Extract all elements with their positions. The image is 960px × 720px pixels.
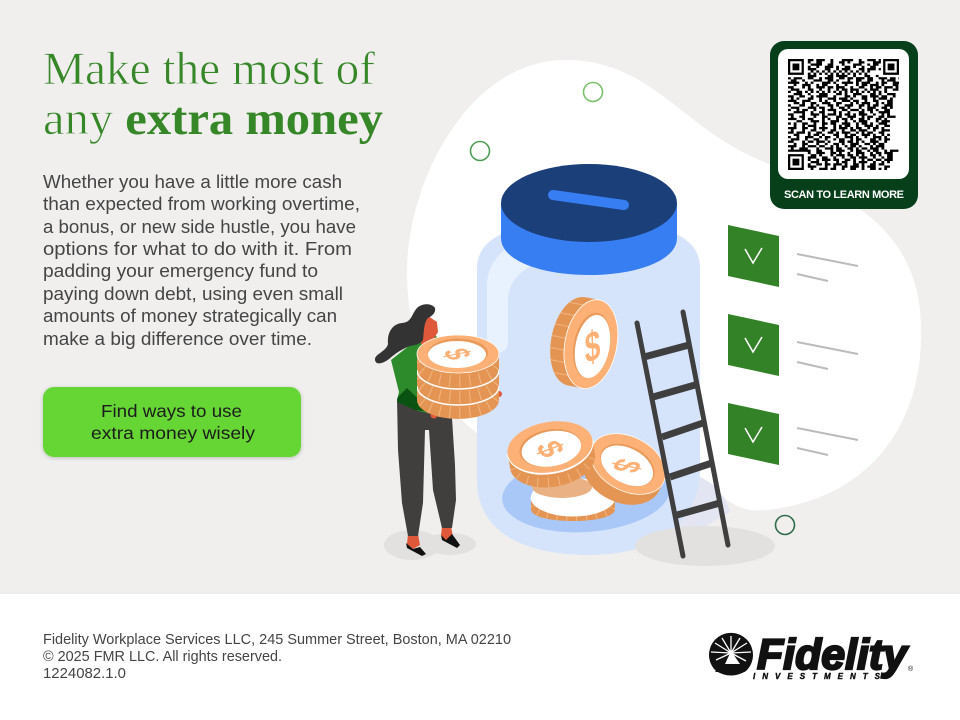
QR card [770,41,918,209]
title [43,43,384,145]
body text: amounts of money strategically can [43,305,337,326]
body text: than expected from working overtime, [43,193,360,214]
title: Make the most of [43,43,375,95]
held coin stack: $ [434,346,479,363]
checklist item 2 [728,314,858,376]
hands [430,412,438,418]
jar highlight [487,240,550,353]
coin shadow [500,450,672,538]
body text: Whether you have a little more cash [43,171,342,192]
floating coin: $ [584,320,601,373]
decorative ring: bottom [776,516,794,534]
face and neck [421,316,438,348]
background blob [407,60,921,510]
checklist item 3 [728,403,858,465]
button: extra money wisely [91,423,255,443]
body text [43,171,360,349]
left coin: $ [528,436,573,462]
title: any extra money [43,93,384,145]
QR code [788,59,899,170]
jar ground shadow [640,477,730,545]
button [43,387,301,457]
coin pile [506,421,666,521]
ankles and shoes [406,526,460,556]
Fidelity logo [709,631,914,681]
ladder shadow [635,526,775,566]
held coin stack [417,335,502,419]
left coin [506,421,596,488]
body text: options for what to do with it. From [43,238,352,259]
decorative ring: top [584,82,602,102]
decorative ring: left [470,142,490,160]
sweater [391,333,440,414]
trousers [397,398,456,536]
right coin [571,421,676,518]
bottom coin [531,476,615,521]
button: Find ways to use [101,401,242,421]
shoe shadows [384,530,476,560]
layer 1 [417,354,499,388]
body text: make a big difference over time. [43,328,312,349]
footer text: 1224082.1.0 [43,666,126,682]
QR caption: SCAN TO LEARN MORE [784,189,904,201]
layer 2 [417,370,499,404]
body text: paying down debt, using even small [43,283,343,304]
logo wordmark: Fidelity [757,631,909,679]
logo emblem [709,633,753,676]
body text: a bonus, or new side hustle, you have [43,216,356,237]
footer text: Fidelity Workplace Services LLC, 245 Summer Street, Boston, MA 02210 [43,632,511,648]
hair [375,304,435,363]
footer text [43,632,511,682]
right coin: $ [603,456,651,476]
person [375,304,476,560]
jar lid [501,164,677,275]
floating coin [550,297,618,389]
layer 3 [417,386,499,419]
lid slot [553,195,624,205]
jar [477,230,700,555]
footer text: © 2025 FMR LLC. All rights reserved. [43,649,282,665]
coin edge ticks [417,362,499,413]
Fidelity logo: ® [908,665,914,673]
body text: padding your emergency fund to [43,260,318,281]
Fidelity logo: INVESTMENTS [753,672,881,681]
ladder [637,312,728,556]
checklist item 1 [728,225,858,287]
